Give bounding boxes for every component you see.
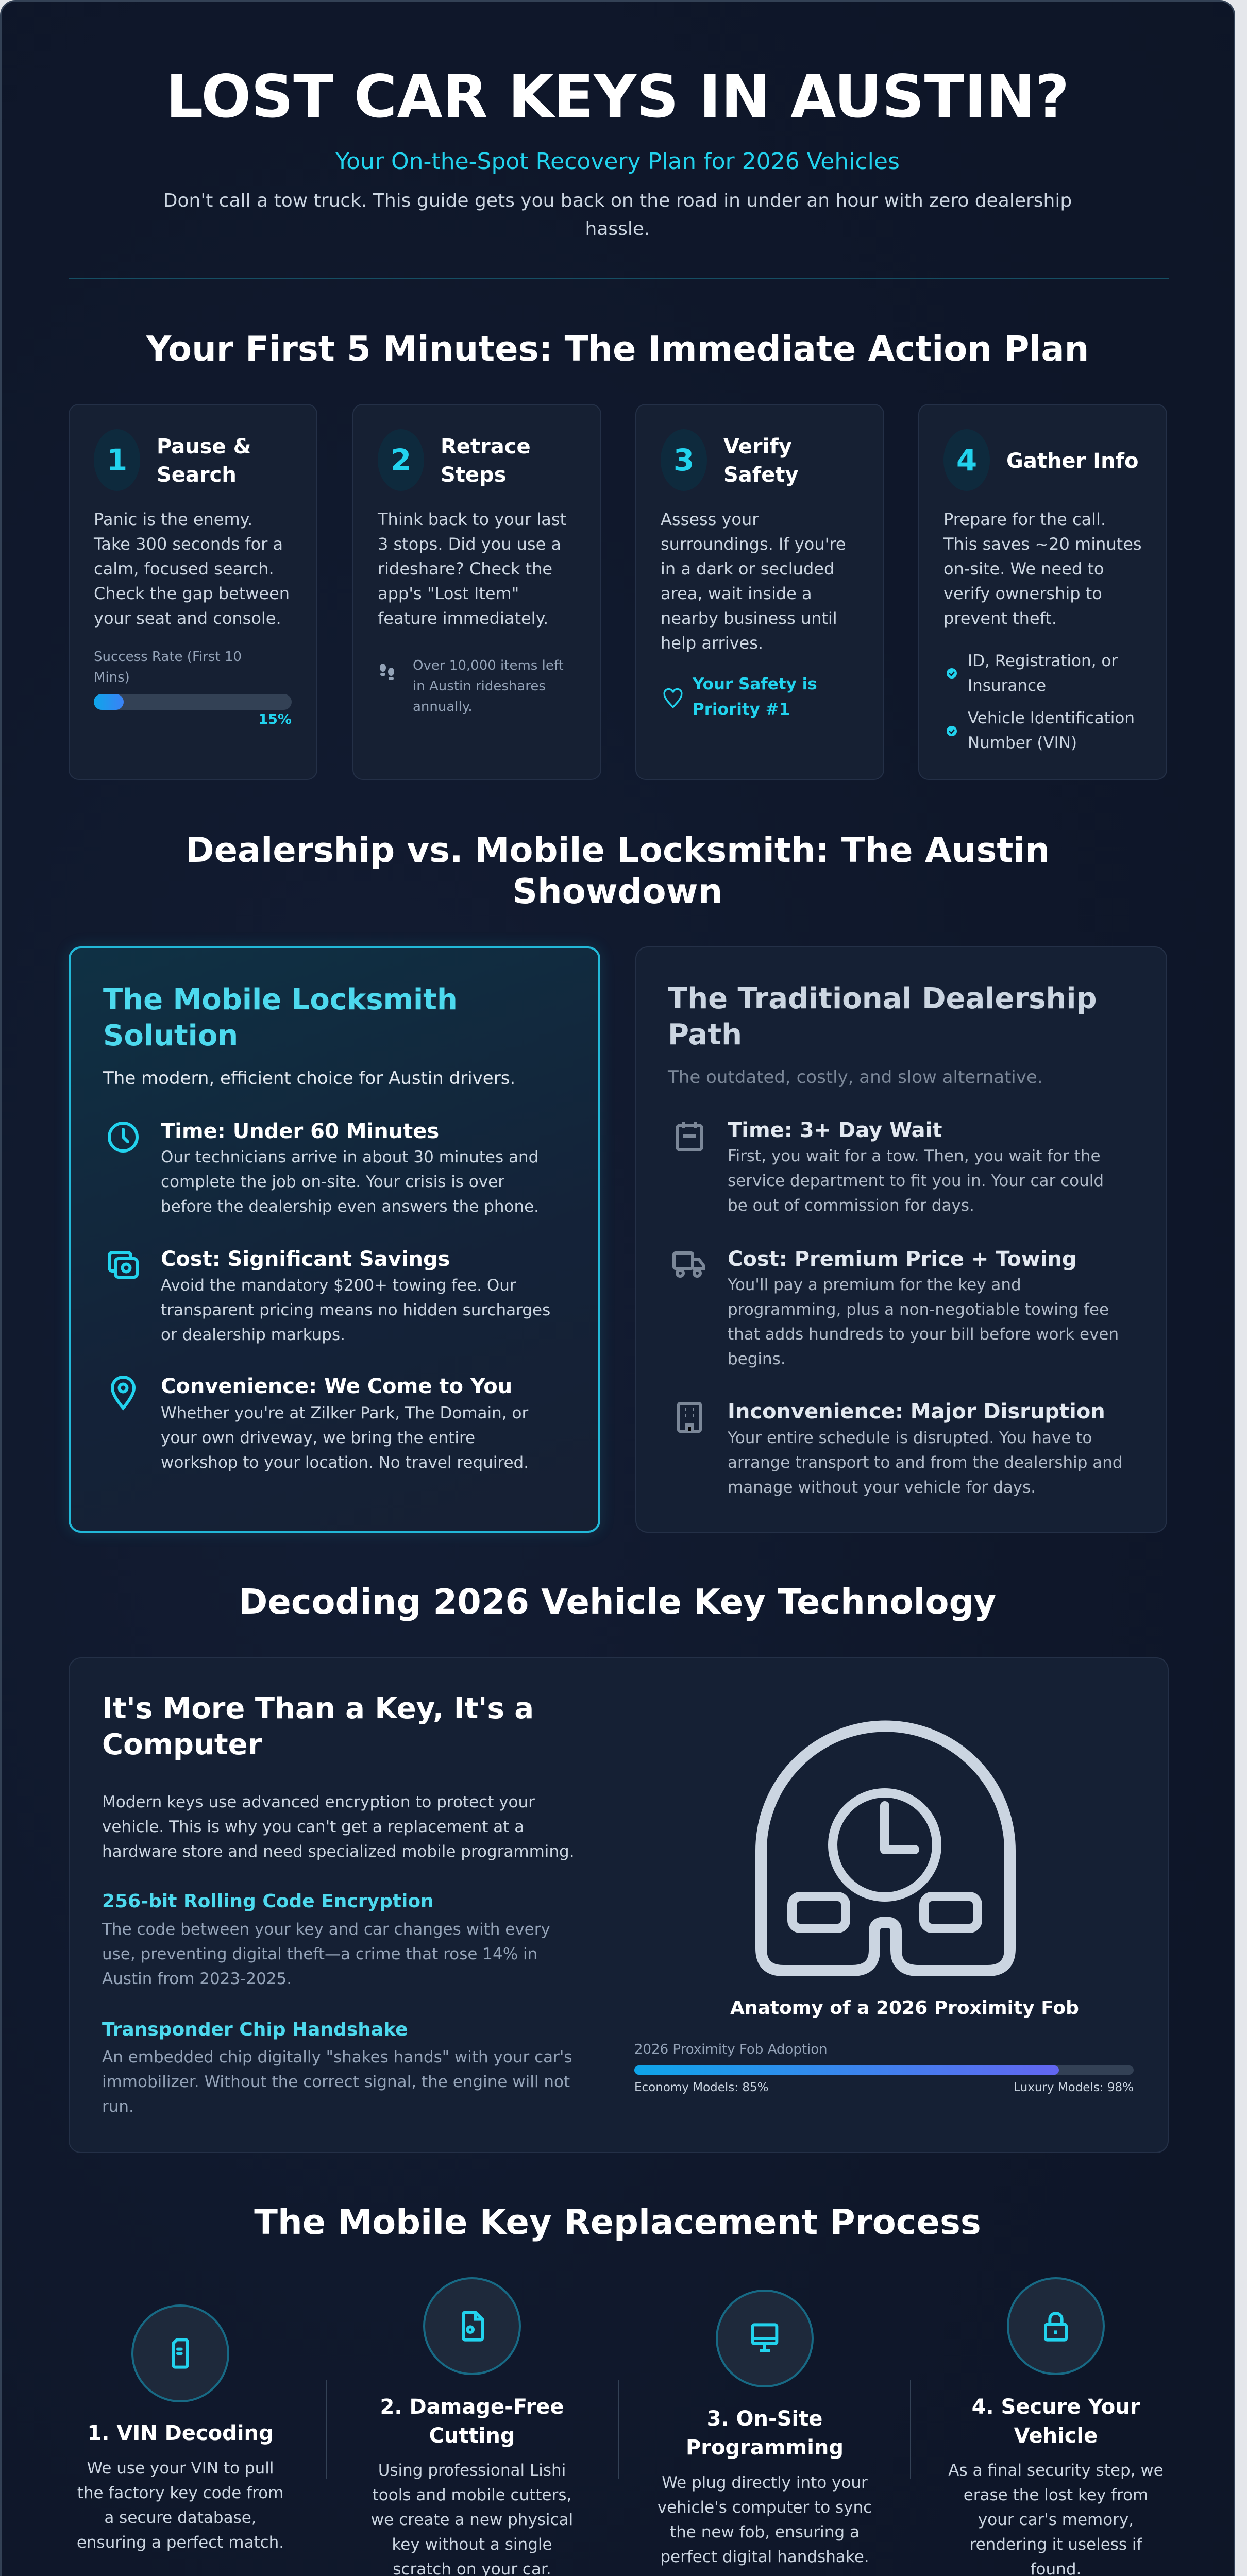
panel: key technology <box>69 1657 1169 2153</box>
icon: savings <box>108 1251 139 1279</box>
panel: key technology: Austin from 2023-2025. <box>102 1970 292 1988</box>
step text: a secure database, <box>104 2509 257 2527</box>
step body: on-site. We need to <box>943 559 1104 579</box>
step text: perfect digital handshake. <box>660 2548 869 2566</box>
checklist: Insurance <box>968 676 1046 695</box>
step text: ensuring a perfect match. <box>77 2533 284 2552</box>
icon: proximity fob <box>742 1710 1031 1984</box>
panel subtitle: The outdated, costly, and slow alternative. <box>668 1067 1043 1088</box>
step text: Using professional Lishi <box>378 2461 566 2480</box>
adoption bar chart: 2026 Proximity Fob Adoption <box>634 2042 828 2057</box>
percent label: 15% <box>258 711 292 727</box>
panel title: Path <box>668 1018 742 1052</box>
step title: Retrace <box>441 435 531 459</box>
panel: step 1 pause & search <box>69 404 317 780</box>
heading: showdown <box>186 830 1050 911</box>
panel: key technology: use, preventing digital theft—a crime that rose 14% in <box>102 1945 537 1963</box>
heading: first 5 minutes: Your First 5 Minutes: The Immediate Action Plan <box>146 329 1089 369</box>
item: time: Time: 3+ Day Wait <box>728 1118 942 1142</box>
item: cost: Cost: Premium Price + Towing <box>728 1247 1077 1271</box>
number badge 2 <box>378 429 424 491</box>
step text: erase the lost key from <box>964 2486 1148 2504</box>
step text <box>631 2470 899 2569</box>
heading: replacement process: The Mobile Key Replacement Process <box>254 2202 981 2242</box>
panel: step 3 verify safety <box>635 404 884 780</box>
step title: Vehicle <box>1014 2424 1098 2448</box>
step title: 4. Secure Your <box>972 2395 1140 2419</box>
step body: nearby business until <box>661 608 837 628</box>
panel: traditional dealership path: be out of commission for days. <box>728 1196 974 1215</box>
step title: 3. On-Site <box>707 2407 822 2431</box>
step text: As a final security step, we <box>948 2461 1164 2480</box>
step text <box>338 2458 606 2576</box>
panel title <box>668 982 1097 1052</box>
adoption bar chart <box>634 2039 1134 2097</box>
panel: key technology: run. <box>102 2097 134 2116</box>
panel title: The Mobile Locksmith <box>103 983 458 1016</box>
heading: showdown: Showdown <box>513 871 722 911</box>
item: time: Time: Under 60 Minutes <box>161 1120 439 1143</box>
stat note <box>413 658 564 715</box>
step title: 1. VIN Decoding <box>87 2421 274 2445</box>
step text: we create a new physical <box>371 2511 573 2529</box>
panel: traditional dealership path: begins. <box>728 1350 786 1368</box>
icon: calendar <box>676 1122 703 1151</box>
item: convenience: Convenience: We Come to You <box>161 1375 512 1398</box>
step body: calm, focused search. <box>94 559 274 579</box>
step 1: VIN decoding <box>46 2304 314 2557</box>
panel: traditional dealership path: First, you wait for a tow. Then, you wait for the <box>728 1147 1101 1165</box>
panel: traditional dealership path: manage without your vehicle for days. <box>728 1478 1036 1497</box>
feature: rolling code: 256-bit Rolling Code Encryption <box>102 1891 434 1912</box>
step text <box>922 2458 1190 2576</box>
panel subtitle: The modern, efficient choice for Austin drivers. <box>103 1068 515 1089</box>
step title <box>338 2393 606 2450</box>
success rate label: Mins) <box>94 670 130 685</box>
step body: Panic is the enemy. <box>94 510 252 529</box>
checklist: Vehicle Identification <box>968 709 1135 727</box>
panel: mobile locksmith solution: complete the job on-site. Your crisis is over <box>161 1173 504 1191</box>
step 4: secure your vehicle <box>922 2277 1190 2576</box>
step 3: on-site programming <box>631 2290 899 2573</box>
panel: traditional dealership path: arrange transport to and from the dealership and <box>728 1453 1123 1472</box>
icon: building <box>677 1402 702 1433</box>
panel: mobile locksmith solution: Our technicians arrive in about 30 minutes and <box>161 1148 538 1166</box>
step title: Pause & <box>157 435 251 459</box>
panel: mobile locksmith solution: transparent pricing means no hidden surcharges <box>161 1301 550 1319</box>
number badge 4 <box>943 429 990 491</box>
fob caption: Anatomy of a 2026 Proximity Fob <box>730 1997 1079 2019</box>
checklist <box>947 652 1135 752</box>
item: cost: Cost: Significant Savings <box>161 1247 450 1271</box>
progress bar 15% <box>94 694 292 710</box>
panel: mobile locksmith solution <box>69 946 600 1533</box>
panel: traditional dealership path: You'll pay a premium for the key and <box>728 1276 1021 1294</box>
step body: Take 300 seconds for a <box>94 534 283 554</box>
checklist: Number (VIN) <box>968 734 1077 752</box>
number badge 1 <box>94 429 140 491</box>
stat note: annually. <box>413 699 473 715</box>
step body: help arrives. <box>661 633 763 653</box>
step body: in a dark or secluded <box>661 559 834 579</box>
step title: Verify <box>723 435 792 459</box>
tech title <box>102 1691 534 1763</box>
tech title: It's More Than a Key, It's a <box>102 1692 534 1725</box>
step text: We use your VIN to pull <box>87 2459 274 2478</box>
icon: monitor circle <box>716 2290 814 2387</box>
panel title: The Traditional Dealership <box>668 982 1097 1015</box>
step title <box>441 435 531 487</box>
step text: vehicle's computer to sync <box>658 2498 872 2517</box>
safety callout: Priority #1 <box>693 700 790 719</box>
step text: rendering it useless if <box>970 2535 1142 2554</box>
step body: Think back to your last <box>378 510 566 529</box>
panel: mobile locksmith solution: Whether you're at Zilker Park, The Domain, or <box>161 1404 528 1422</box>
heading: showdown: Dealership vs. Mobile Locksmith: The Austin <box>186 830 1050 870</box>
number badge 1: 1 <box>107 443 127 478</box>
panel title <box>103 983 458 1053</box>
icon: heart <box>664 688 682 708</box>
heading: key technology: Decoding 2026 Vehicle Key Technology <box>239 1582 996 1622</box>
item: inconvenience: Inconvenience: Major Disruption <box>728 1400 1105 1423</box>
tagline <box>163 190 1072 240</box>
step body: area, wait inside a <box>661 584 812 603</box>
panel: traditional dealership path <box>635 946 1167 1533</box>
step body: This saves ~20 minutes <box>943 534 1142 554</box>
step text: tools and mobile cutters, <box>373 2486 571 2504</box>
panel: traditional dealership path: service department to fit you in. Your car could <box>728 1172 1104 1190</box>
step title: Programming <box>686 2436 844 2460</box>
step body <box>661 510 846 653</box>
success rate label: Success Rate (First 10 <box>94 649 242 665</box>
number badge 3 <box>661 429 707 491</box>
step title <box>922 2393 1190 2450</box>
step body: Check the gap between <box>94 584 290 603</box>
stat note: Over 10,000 items left <box>413 658 564 673</box>
tech intro: vehicle. This is why you can't get a replacement at a <box>102 1818 524 1836</box>
step body: your seat and console. <box>94 608 281 628</box>
panel: mobile locksmith solution: Avoid the mandatory $200+ towing fee. Our <box>161 1276 516 1295</box>
step title: Safety <box>723 463 799 487</box>
tech intro: hardware store and need specialized mobile programming. <box>102 1842 575 1861</box>
panel: key technology: immobilizer. Without the correct signal, the engine will not <box>102 2073 570 2091</box>
step body <box>94 510 290 628</box>
step body: surroundings. If you're <box>661 534 846 554</box>
step text <box>46 2456 314 2555</box>
step 2: damage-free cutting <box>338 2277 606 2576</box>
number badge 3: 3 <box>673 443 694 478</box>
success rate label <box>94 649 242 685</box>
feature: transponder: Transponder Chip Handshake <box>102 2019 408 2040</box>
step text: the factory key code from <box>77 2484 283 2502</box>
step title <box>723 435 799 487</box>
panel: key technology: An embedded chip digitally "shakes hands" with your car's <box>102 2048 572 2066</box>
subtitle: Your On-the-Spot Recovery Plan for 2026 Vehicles <box>335 148 900 175</box>
title: LOST CAR KEYS IN AUSTIN? <box>166 62 1069 131</box>
icon: file circle <box>423 2277 521 2375</box>
panel: traditional dealership path: that adds hundreds to your bill before work even <box>728 1325 1119 1344</box>
panel title: Solution <box>103 1019 238 1053</box>
step title <box>631 2404 899 2462</box>
panel: traditional dealership path: Your entire schedule is disrupted. You have to <box>728 1429 1092 1447</box>
panel: mobile locksmith solution: or dealership markups. <box>161 1326 345 1344</box>
icon: lock circle <box>1007 2277 1105 2375</box>
step text: your car's memory, <box>978 2511 1134 2529</box>
step body: Assess your <box>661 510 759 529</box>
step body: 3 stops. Did you use a <box>378 534 561 554</box>
icon: location pin <box>111 1376 136 1411</box>
number badge 4: 4 <box>956 443 977 478</box>
step body: app's "Lost Item" <box>378 584 519 603</box>
step body <box>377 510 566 628</box>
step body <box>943 510 1142 628</box>
tech intro <box>102 1790 575 1864</box>
tech intro: Modern keys use advanced encryption to protect your <box>102 1793 535 1811</box>
icon: footprints <box>380 664 394 680</box>
tagline: hassle. <box>585 218 650 240</box>
step title: Cutting <box>429 2424 515 2448</box>
stat note: in Austin rideshares <box>413 679 546 694</box>
step title: 2. Damage-Free <box>380 2395 564 2419</box>
icon: clock <box>108 1122 139 1153</box>
checklist: ID, Registration, or <box>968 652 1118 670</box>
step text: the new fob, ensuring a <box>670 2523 860 2541</box>
step title <box>157 435 251 487</box>
tagline: Don't call a tow truck. This guide gets you back on the road in under an hour with zero dealership <box>163 190 1072 211</box>
panel: step 4 gather info <box>918 404 1167 780</box>
panel: traditional dealership path: programming, plus a non-negotiable towing fee <box>728 1300 1109 1319</box>
step title: Search <box>157 463 237 487</box>
panel: step 2 retrace steps <box>352 404 601 780</box>
step body: prevent theft. <box>943 608 1057 628</box>
panel: mobile locksmith solution: before the dealership even answers the phone. <box>161 1197 539 1216</box>
adoption bar chart: Economy Models: 85% <box>634 2081 768 2094</box>
safety callout <box>693 675 817 719</box>
step body: feature immediately. <box>378 608 548 628</box>
icon: tow truck <box>672 1251 705 1278</box>
step body: Prepare for the call. <box>943 510 1106 529</box>
panel: key technology: The code between your key and car changes with every <box>102 1920 550 1939</box>
icon: key fob circle <box>131 2304 229 2402</box>
adoption bar chart: Luxury Models: 98% <box>1014 2081 1134 2094</box>
step body: rideshare? Check the <box>378 559 552 579</box>
number badge 2: 2 <box>391 443 411 478</box>
panel: mobile locksmith solution: workshop to your location. No travel required. <box>161 1453 529 1472</box>
panel: mobile locksmith solution: your own driveway, we bring the entire <box>161 1429 475 1447</box>
step body: verify ownership to <box>943 584 1102 603</box>
step title: Gather Info <box>1006 449 1138 473</box>
tech title: Computer <box>102 1728 262 1761</box>
step title: Steps <box>441 463 506 487</box>
step text: key without a single <box>392 2535 552 2554</box>
step text: We plug directly into your <box>662 2473 868 2492</box>
safety callout: Your Safety is <box>693 675 817 693</box>
